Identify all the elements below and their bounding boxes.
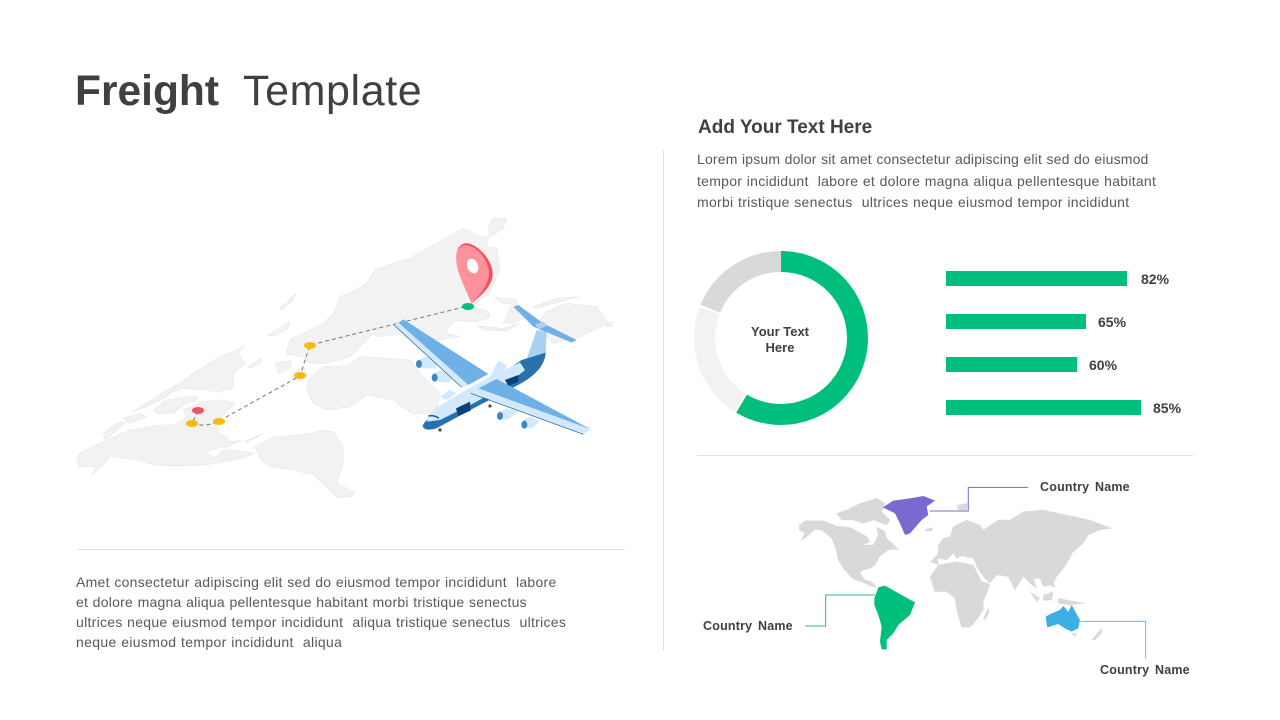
- text block: bottom left: et dolore magna aliqua pellentesque habitant morbi tristique senectus: [76, 594, 527, 610]
- text block: top right: Lorem ipsum dolor sit amet consectetur adipiscing elit sed do eiusmod: [697, 151, 1149, 167]
- donut label: Here: [766, 340, 794, 355]
- icon: cargo plane: [394, 305, 591, 434]
- title: Template: [243, 67, 422, 115]
- purple connector: [930, 487, 1028, 511]
- title: Freight: [75, 68, 219, 115]
- region: blue: [1046, 605, 1080, 632]
- flight route: [192, 306, 468, 425]
- title: [75, 67, 422, 115]
- text block: top right: [697, 151, 1156, 210]
- value: 60%: 60%: [1089, 357, 1117, 373]
- value: 82%: 82%: [1141, 271, 1169, 287]
- value: 85%: 85%: [1153, 400, 1181, 416]
- region: purple: [883, 496, 935, 535]
- donut chart: [705, 261, 857, 414]
- world map: [799, 487, 1146, 658]
- route stops: [186, 303, 474, 427]
- green connector: [805, 595, 875, 626]
- value: 65%: 65%: [1098, 314, 1126, 330]
- text block: top right: tempor incididunt labore et dolore magna aliqua pellentesque habitant: [697, 172, 1156, 188]
- heading: Add Your Text Here: [698, 117, 872, 138]
- text block: bottom left: Amet consectetur adipiscing elit sed do eiusmod tempor incididunt labore: [76, 574, 557, 590]
- icon: location pin: [456, 243, 493, 303]
- label: south america: Country Name: [703, 619, 793, 633]
- blue connector: [1081, 621, 1146, 658]
- label: australia: Country Name: [1100, 663, 1190, 677]
- label: north: Country Name: [1040, 480, 1130, 494]
- donut label: Your Text: [751, 324, 809, 339]
- text block: top right: morbi tristique senectus ultrices neque eiusmod tempor incididunt: [697, 194, 1129, 210]
- donut label: [751, 324, 809, 355]
- region: green: [874, 586, 915, 649]
- text block: bottom left: neque eiusmod tempor incididunt aliqua: [76, 634, 342, 650]
- text block: bottom left: [76, 574, 566, 650]
- bar chart: [946, 271, 1141, 415]
- text block: bottom left: ultrices neque eiusmod tempor incididunt aliqua tristique senectus ultrices: [76, 614, 566, 630]
- isometric map: [77, 218, 613, 497]
